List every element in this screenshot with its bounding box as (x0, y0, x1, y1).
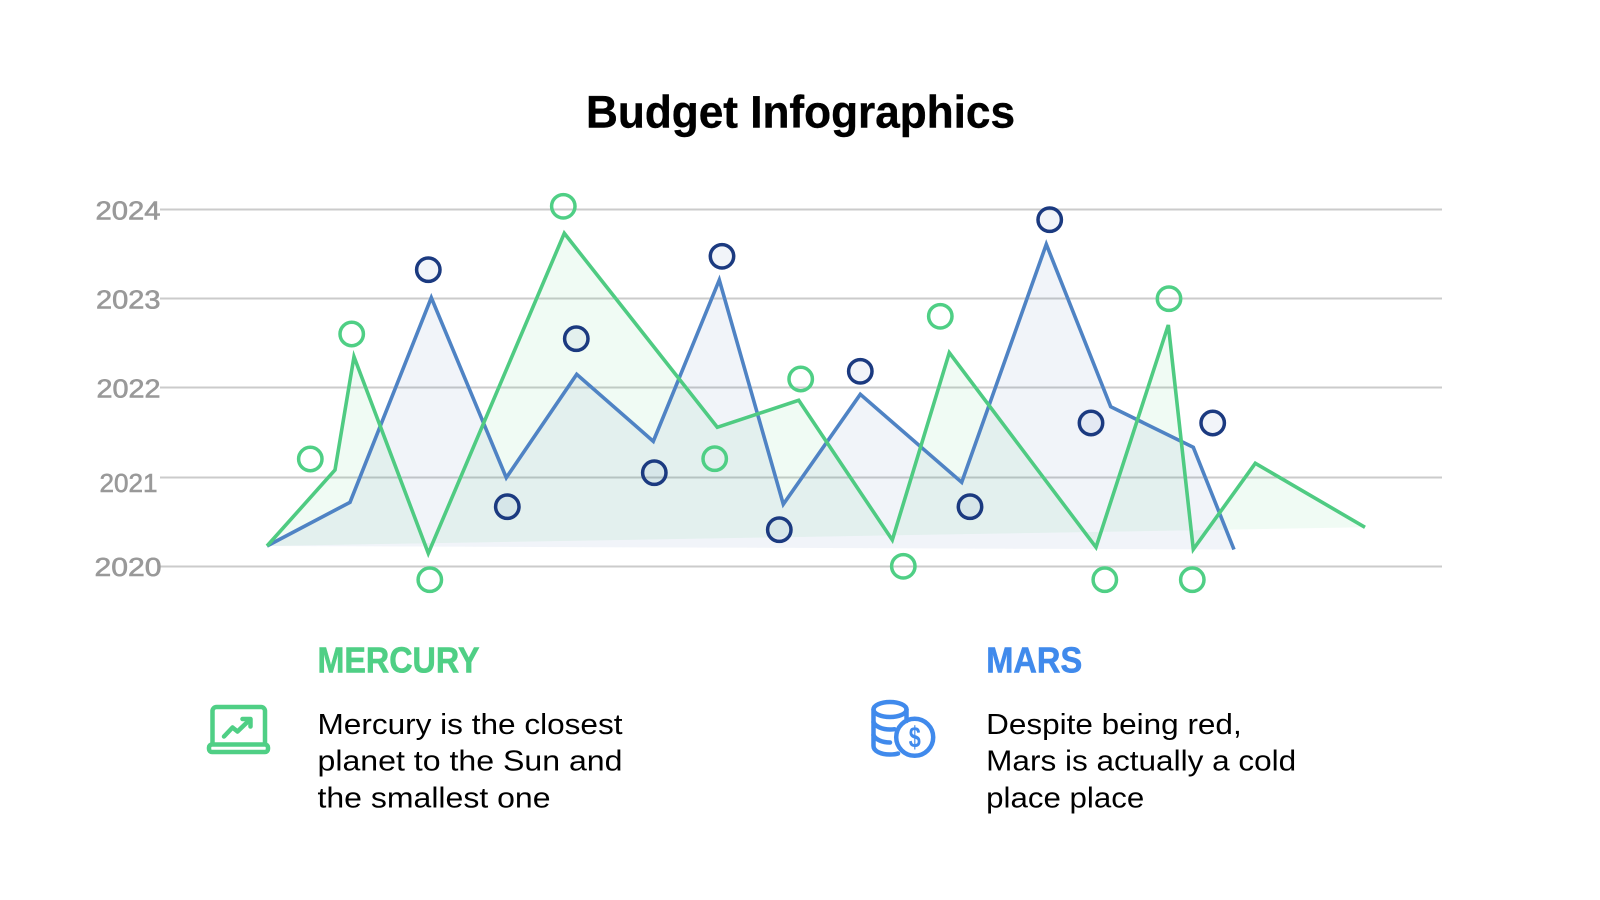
icon: coin stack with dollar (874, 702, 933, 756)
text: mars description: place place (986, 782, 1144, 814)
y axis labels: 2023 (96, 286, 160, 314)
text: mercury description: planet to the Sun and (318, 746, 622, 778)
heading: mars: MARS (986, 640, 1082, 680)
markers: mars (417, 208, 1224, 541)
y axis labels (94, 198, 162, 582)
icon: laptop with rising arrow (209, 707, 268, 752)
text: mercury description: Mercury is the closest (318, 709, 623, 741)
markers: mercury (299, 195, 1204, 591)
text: mars description: Mars is actually a cold (986, 746, 1296, 778)
panel: mars (874, 640, 1296, 814)
y axis labels: 2022 (96, 376, 160, 404)
area: mercury series (267, 233, 1365, 553)
heading: mercury: MERCURY (318, 640, 480, 680)
area: mars series (267, 244, 1234, 550)
chart: budget lines by year (94, 195, 1442, 591)
text: mercury description (318, 709, 623, 814)
icon: coin stack with dollar: $ (909, 720, 921, 754)
y axis labels: 2021 (100, 470, 158, 498)
text: mars description: Despite being red, (986, 709, 1242, 741)
text: mercury description: the smallest one (318, 782, 550, 814)
y axis labels: 2024 (96, 198, 160, 226)
line: mercury series (267, 233, 1365, 553)
text: mars description (986, 709, 1296, 814)
panel: mercury (209, 640, 623, 814)
line: mars series (267, 244, 1234, 550)
title: Budget Infographics (586, 86, 1015, 138)
y axis labels: 2020 (94, 554, 162, 582)
